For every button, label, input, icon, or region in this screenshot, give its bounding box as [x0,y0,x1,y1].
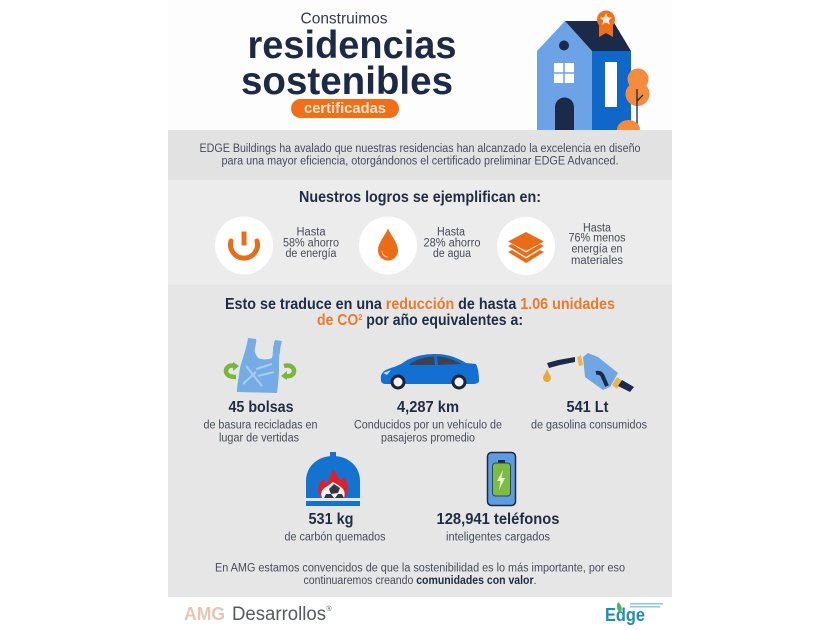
text: fuel: de gasolina consumidos [531,420,647,432]
icon: smartphone [488,452,516,506]
heading: CO2 reduction: Esto se traduce en una reducción de hasta 1.06 unidades [225,296,615,313]
text: materials saving: energía en [572,244,622,256]
icon: plastic bag [226,338,294,393]
text: bags: de basura recicladas en [204,420,318,432]
panel: header [168,0,672,130]
text: introduction [200,143,640,168]
text: kilometres: Conducidos por un vehículo de [354,420,502,432]
heading: achievements: Nuestros logros se ejemplifican en: [299,189,541,206]
text: introduction: para una mayor eficiencia, otorgándonos el certificado preliminar EDGE Advanced. [222,156,618,168]
text: energy saving [283,226,339,260]
panel: equivalences [168,285,672,597]
icon: water drop [359,216,417,274]
icon: car [381,354,479,390]
text: phones: 128,941 teléfonos [436,511,560,528]
logo: AMG Desarrollos [184,604,332,625]
text: energy saving: de energía [286,248,337,260]
text: kilometres: 4,287 km [397,399,459,416]
text: materials saving: materiales [571,255,623,267]
text: closing statement: continuaremos creando comunidades con valor. [304,575,536,587]
text: phones [436,511,560,544]
panel: introduction [168,130,672,180]
badge: certificadas [291,99,399,118]
text: bags: lugar de vertidas [219,433,299,445]
text: closing statement [215,563,625,587]
text: kilometres: pasajeros promedio [381,433,475,445]
text: water saving [424,226,480,260]
icon: house [537,10,650,130]
icon: power [215,216,273,274]
text: coal [284,511,386,544]
text: materials saving: Hasta [583,223,612,235]
heading: Construimos: Construimos [300,10,388,28]
text: energy saving: 58% ahorro [283,238,339,250]
heading: CO2 reduction [225,296,615,329]
heading: CO2 reduction: de CO [317,312,358,329]
text: bags [204,399,318,445]
text: water saving: 28% ahorro [424,238,480,250]
logo: Edge [605,602,663,625]
logo: Edge: Edge [605,605,645,625]
title [241,24,456,103]
icon: coal furnace [306,452,360,506]
panel: achievements [168,180,672,285]
text: closing statement: En AMG estamos convencidos de que la sostenibilidad es lo más importante, por eso [215,563,625,575]
text: energy saving: Hasta [296,226,326,238]
icon: fuel nozzle [543,353,634,392]
text: phones: inteligentes cargados [446,532,550,544]
logo: AMG Desarrollos: AMG [184,604,225,624]
logo: AMG Desarrollos: Desarrollos [232,604,326,625]
logo: AMG Desarrollos: ® [326,605,332,613]
text: kilometres [354,399,502,445]
text: bags: 45 bolsas [228,399,294,416]
text: fuel: 541 Lt [566,399,608,416]
badge: certificadas: certificadas [304,100,386,117]
heading: CO2 reduction: 2 [358,313,363,322]
text: materials saving: 76% menos [568,233,626,245]
title: sostenibles [241,60,453,103]
title: residencias [248,24,456,67]
heading: CO2 reduction: por año equivalentes a: [362,312,523,329]
text: water saving: de agua [433,248,472,260]
text: coal: 531 kg [308,511,354,528]
text: water saving: Hasta [437,226,466,238]
icon: layers [497,217,555,275]
text: introduction: EDGE Buildings ha avalado que nuestras residencias han alcanzado la excelencia en diseño [200,143,640,155]
text: materials saving [568,223,626,267]
text: coal: de carbón quemados [284,532,386,544]
text: fuel [531,399,647,432]
